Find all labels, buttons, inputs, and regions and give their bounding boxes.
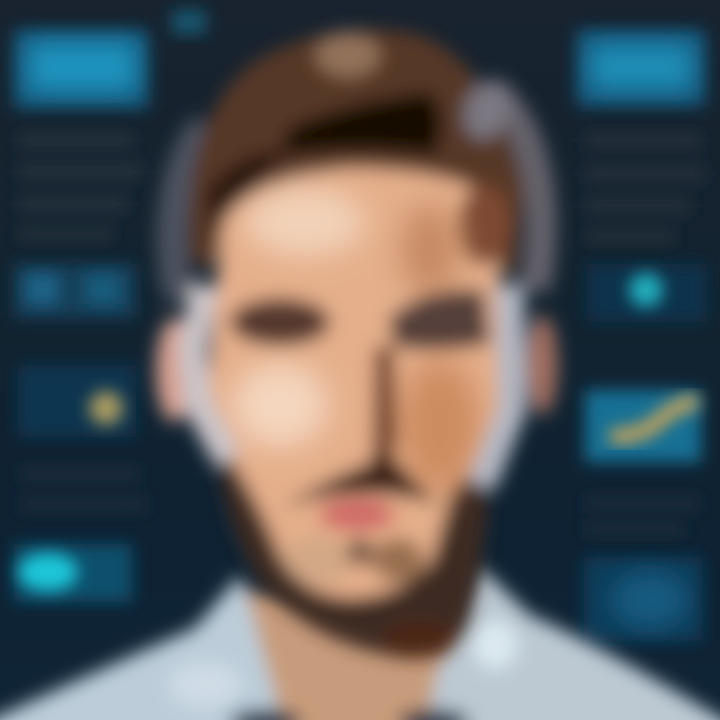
lips bbox=[319, 499, 395, 531]
right lower text lines bbox=[585, 498, 700, 534]
panel: lower right card bbox=[584, 557, 702, 641]
panel: left middle card bbox=[14, 264, 136, 318]
panel: chart card bbox=[585, 390, 701, 462]
nose shadow bbox=[372, 345, 398, 465]
grey streak in hair bbox=[456, 74, 518, 146]
panel: top right cyan card bbox=[577, 30, 705, 106]
chin skin bbox=[286, 536, 350, 584]
collar left bbox=[229, 709, 301, 720]
left data panels bbox=[14, 30, 148, 602]
soul patch bbox=[346, 538, 374, 566]
beard base bbox=[212, 430, 492, 658]
face skin bbox=[205, 168, 505, 598]
left cheek light bbox=[232, 363, 328, 447]
shirt bbox=[0, 565, 720, 720]
grey headset band bbox=[172, 125, 205, 300]
panel: right glowing dot card bbox=[587, 264, 707, 322]
forehead highlight bbox=[245, 188, 365, 256]
forehead right shade bbox=[458, 185, 510, 265]
neck skin bbox=[245, 590, 450, 720]
collar right bbox=[398, 709, 470, 720]
left text lines bbox=[18, 135, 143, 239]
right cheek shade bbox=[400, 359, 480, 491]
beard lower right reddish bbox=[384, 622, 456, 658]
left lower text lines bbox=[20, 470, 148, 509]
pale temple band left bbox=[192, 285, 228, 460]
head and face bbox=[156, 29, 558, 658]
right eye and brow bbox=[388, 290, 490, 350]
top small panel bbox=[172, 10, 206, 34]
panel: left gold dot card bbox=[18, 365, 136, 437]
ears bbox=[156, 318, 192, 422]
moustache bbox=[282, 448, 438, 508]
panel: top left cyan card bbox=[14, 30, 148, 108]
right data panels bbox=[577, 30, 707, 641]
pale temple band right bbox=[482, 285, 512, 485]
panel: bright cyan card bbox=[14, 544, 132, 602]
right text lines bbox=[585, 135, 705, 241]
hair bbox=[189, 29, 525, 280]
left eye and brow bbox=[230, 298, 330, 346]
